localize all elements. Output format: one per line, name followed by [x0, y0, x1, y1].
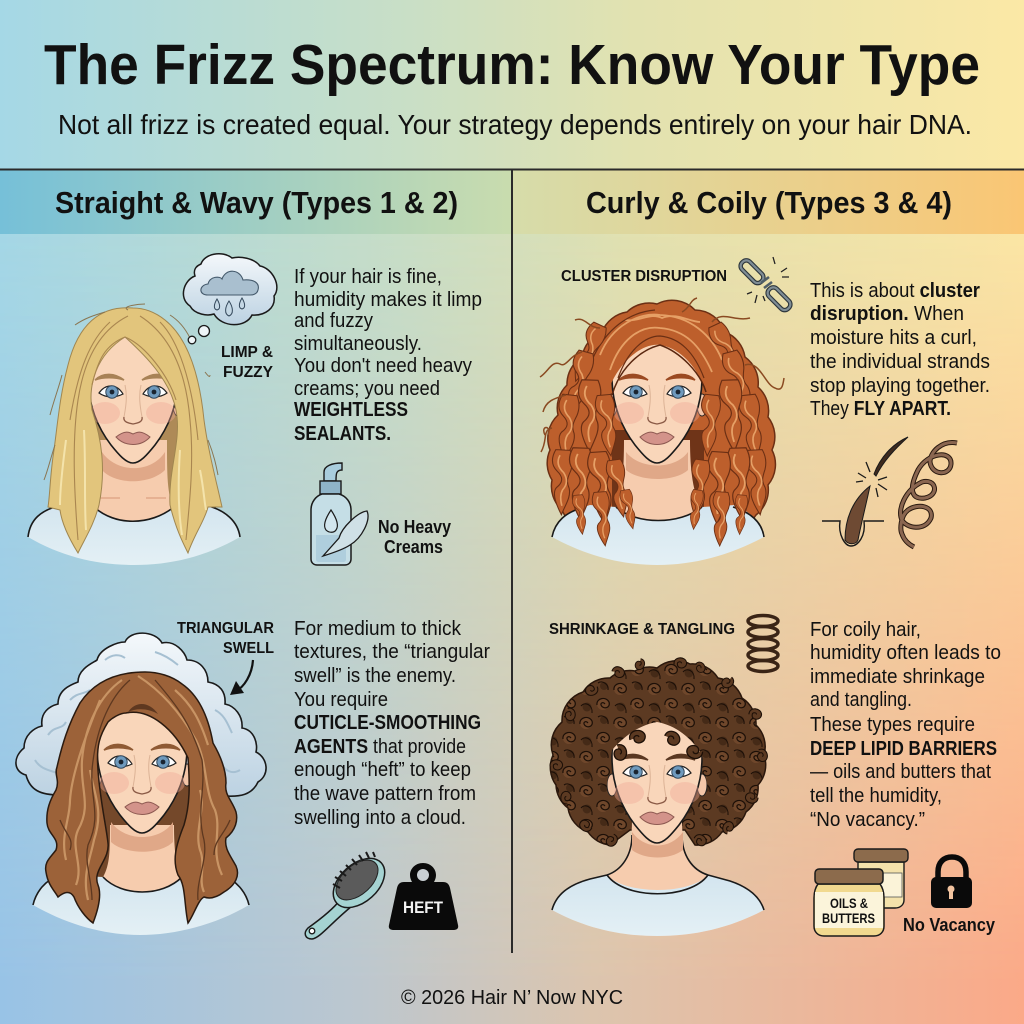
text: cuticle-smoothing agents: swelling into a cloud. — [294, 807, 466, 829]
text: cuticle-smoothing agents: enough “heft” to keep — [294, 759, 471, 781]
panel: wavy hair — [16, 618, 490, 939]
text: cuticle-smoothing agents: swell” is the enemy. — [294, 665, 456, 687]
text: deep lipid barriers: tell the humidity, — [810, 785, 942, 807]
text: cluster disruption: This is about cluster — [810, 280, 980, 302]
text: cuticle-smoothing agents — [294, 618, 490, 829]
label: no heavy creams: No Heavy — [378, 517, 451, 537]
column heading: straight and wavy: Straight & Wavy (Types 1 & 2) — [55, 185, 458, 220]
portrait: dark coily hair — [549, 657, 768, 936]
text: weightless sealants — [294, 266, 482, 445]
label: triangular swell — [177, 620, 274, 657]
text: cuticle-smoothing agents: You require — [294, 689, 388, 711]
panel: straight hair — [28, 254, 482, 565]
text: cluster disruption — [810, 280, 990, 420]
text: weightless sealants: simultaneously. — [294, 333, 422, 355]
column heading: curly and coily: Curly & Coily (Types 3 & 4) — [586, 185, 952, 220]
label: limp and fuzzy — [221, 344, 273, 381]
title: The Frizz Spectrum: Know Your Type — [44, 33, 980, 97]
text: weightless sealants: humidity makes it limp — [294, 289, 482, 311]
text: cuticle-smoothing agents: AGENTS that provide — [294, 736, 466, 758]
text: deep lipid barriers: — oils and butters that — [810, 761, 991, 783]
subtitle: Not all frizz is created equal. Your strategy depends entirely on your hair DNA. — [58, 109, 972, 140]
label: cluster disruption: CLUSTER DISRUPTION — [561, 268, 727, 285]
label: limp and fuzzy: LIMP & — [221, 344, 273, 361]
text: cuticle-smoothing agents: the wave pattern from — [294, 783, 476, 805]
text: cluster disruption: disruption. When — [810, 303, 964, 325]
thought bubble with rain cloud — [183, 254, 277, 344]
text: weightless sealants: You don't need heavy — [294, 355, 472, 377]
text: cluster disruption: stop playing together. — [810, 375, 990, 397]
text: cuticle-smoothing agents: For medium to thick — [294, 618, 462, 640]
text: cuticle-smoothing agents: textures, the “triangular — [294, 641, 490, 663]
label: limp and fuzzy: FUZZY — [223, 364, 273, 381]
text: weightless sealants: SEALANTS. — [294, 423, 391, 445]
text: weightless sealants: If your hair is fine, — [294, 266, 442, 288]
text: deep lipid barriers: These types require — [810, 714, 975, 736]
label: no vacancy: No Vacancy — [903, 915, 995, 935]
icon: heft weight — [389, 863, 458, 930]
icon: padlock — [931, 857, 972, 908]
icon: frizz cloud — [16, 633, 266, 796]
portrait: auburn curly hair — [540, 298, 784, 565]
footer copyright: © 2026 Hair N’ Now NYC — [401, 987, 623, 1009]
label: triangular swell: SWELL — [223, 640, 274, 657]
header band: straight and wavy — [0, 170, 512, 234]
label: no heavy creams — [378, 517, 451, 557]
text: deep lipid barriers: humidity often leads to — [810, 642, 1001, 664]
panel: curly hair — [540, 257, 990, 565]
header band: curly and coily — [512, 170, 1024, 234]
portrait: blonde straight hair — [28, 304, 240, 565]
text: weightless sealants: creams; you need — [294, 378, 440, 400]
text: deep lipid barriers: and tangling. — [810, 689, 912, 711]
icon: coil spring — [748, 616, 778, 672]
text: deep lipid barriers: “No vacancy.” — [810, 809, 925, 831]
text: deep lipid barriers: immediate shrinkage — [810, 666, 985, 688]
arrow: to the swell — [230, 660, 253, 695]
text: cluster disruption: They FLY APART. — [810, 398, 951, 420]
icon: broken chain — [739, 257, 792, 312]
label: triangular swell: TRIANGULAR — [177, 620, 274, 637]
icon: jars of oils and butters: OILS & — [830, 895, 868, 911]
icon: heft weight: HEFT — [403, 898, 444, 917]
icon: hair brush — [305, 849, 394, 939]
icon: jars of oils and butters — [814, 849, 908, 936]
portrait: brown wavy hair — [33, 672, 249, 935]
text: cluster disruption: moisture hits a curl, — [810, 327, 977, 349]
text: cluster disruption: the individual strands — [810, 351, 990, 373]
panel: coily hair — [549, 616, 1001, 936]
icon: bottle and feather — [311, 463, 368, 565]
text: deep lipid barriers — [810, 619, 1001, 831]
text: deep lipid barriers: For coily hair, — [810, 619, 921, 641]
icon: broken strand and spiral curl — [822, 437, 957, 547]
text: cuticle-smoothing agents: CUTICLE-SMOOTHING — [294, 712, 481, 734]
text: weightless sealants: and fuzzy — [294, 310, 373, 332]
icon: jars of oils and butters: BUTTERS — [822, 910, 875, 926]
label: shrinkage and tangling: SHRINKAGE & TANGLING — [549, 621, 735, 638]
text: weightless sealants: WEIGHTLESS — [294, 399, 408, 421]
label: no heavy creams: Creams — [384, 537, 443, 557]
